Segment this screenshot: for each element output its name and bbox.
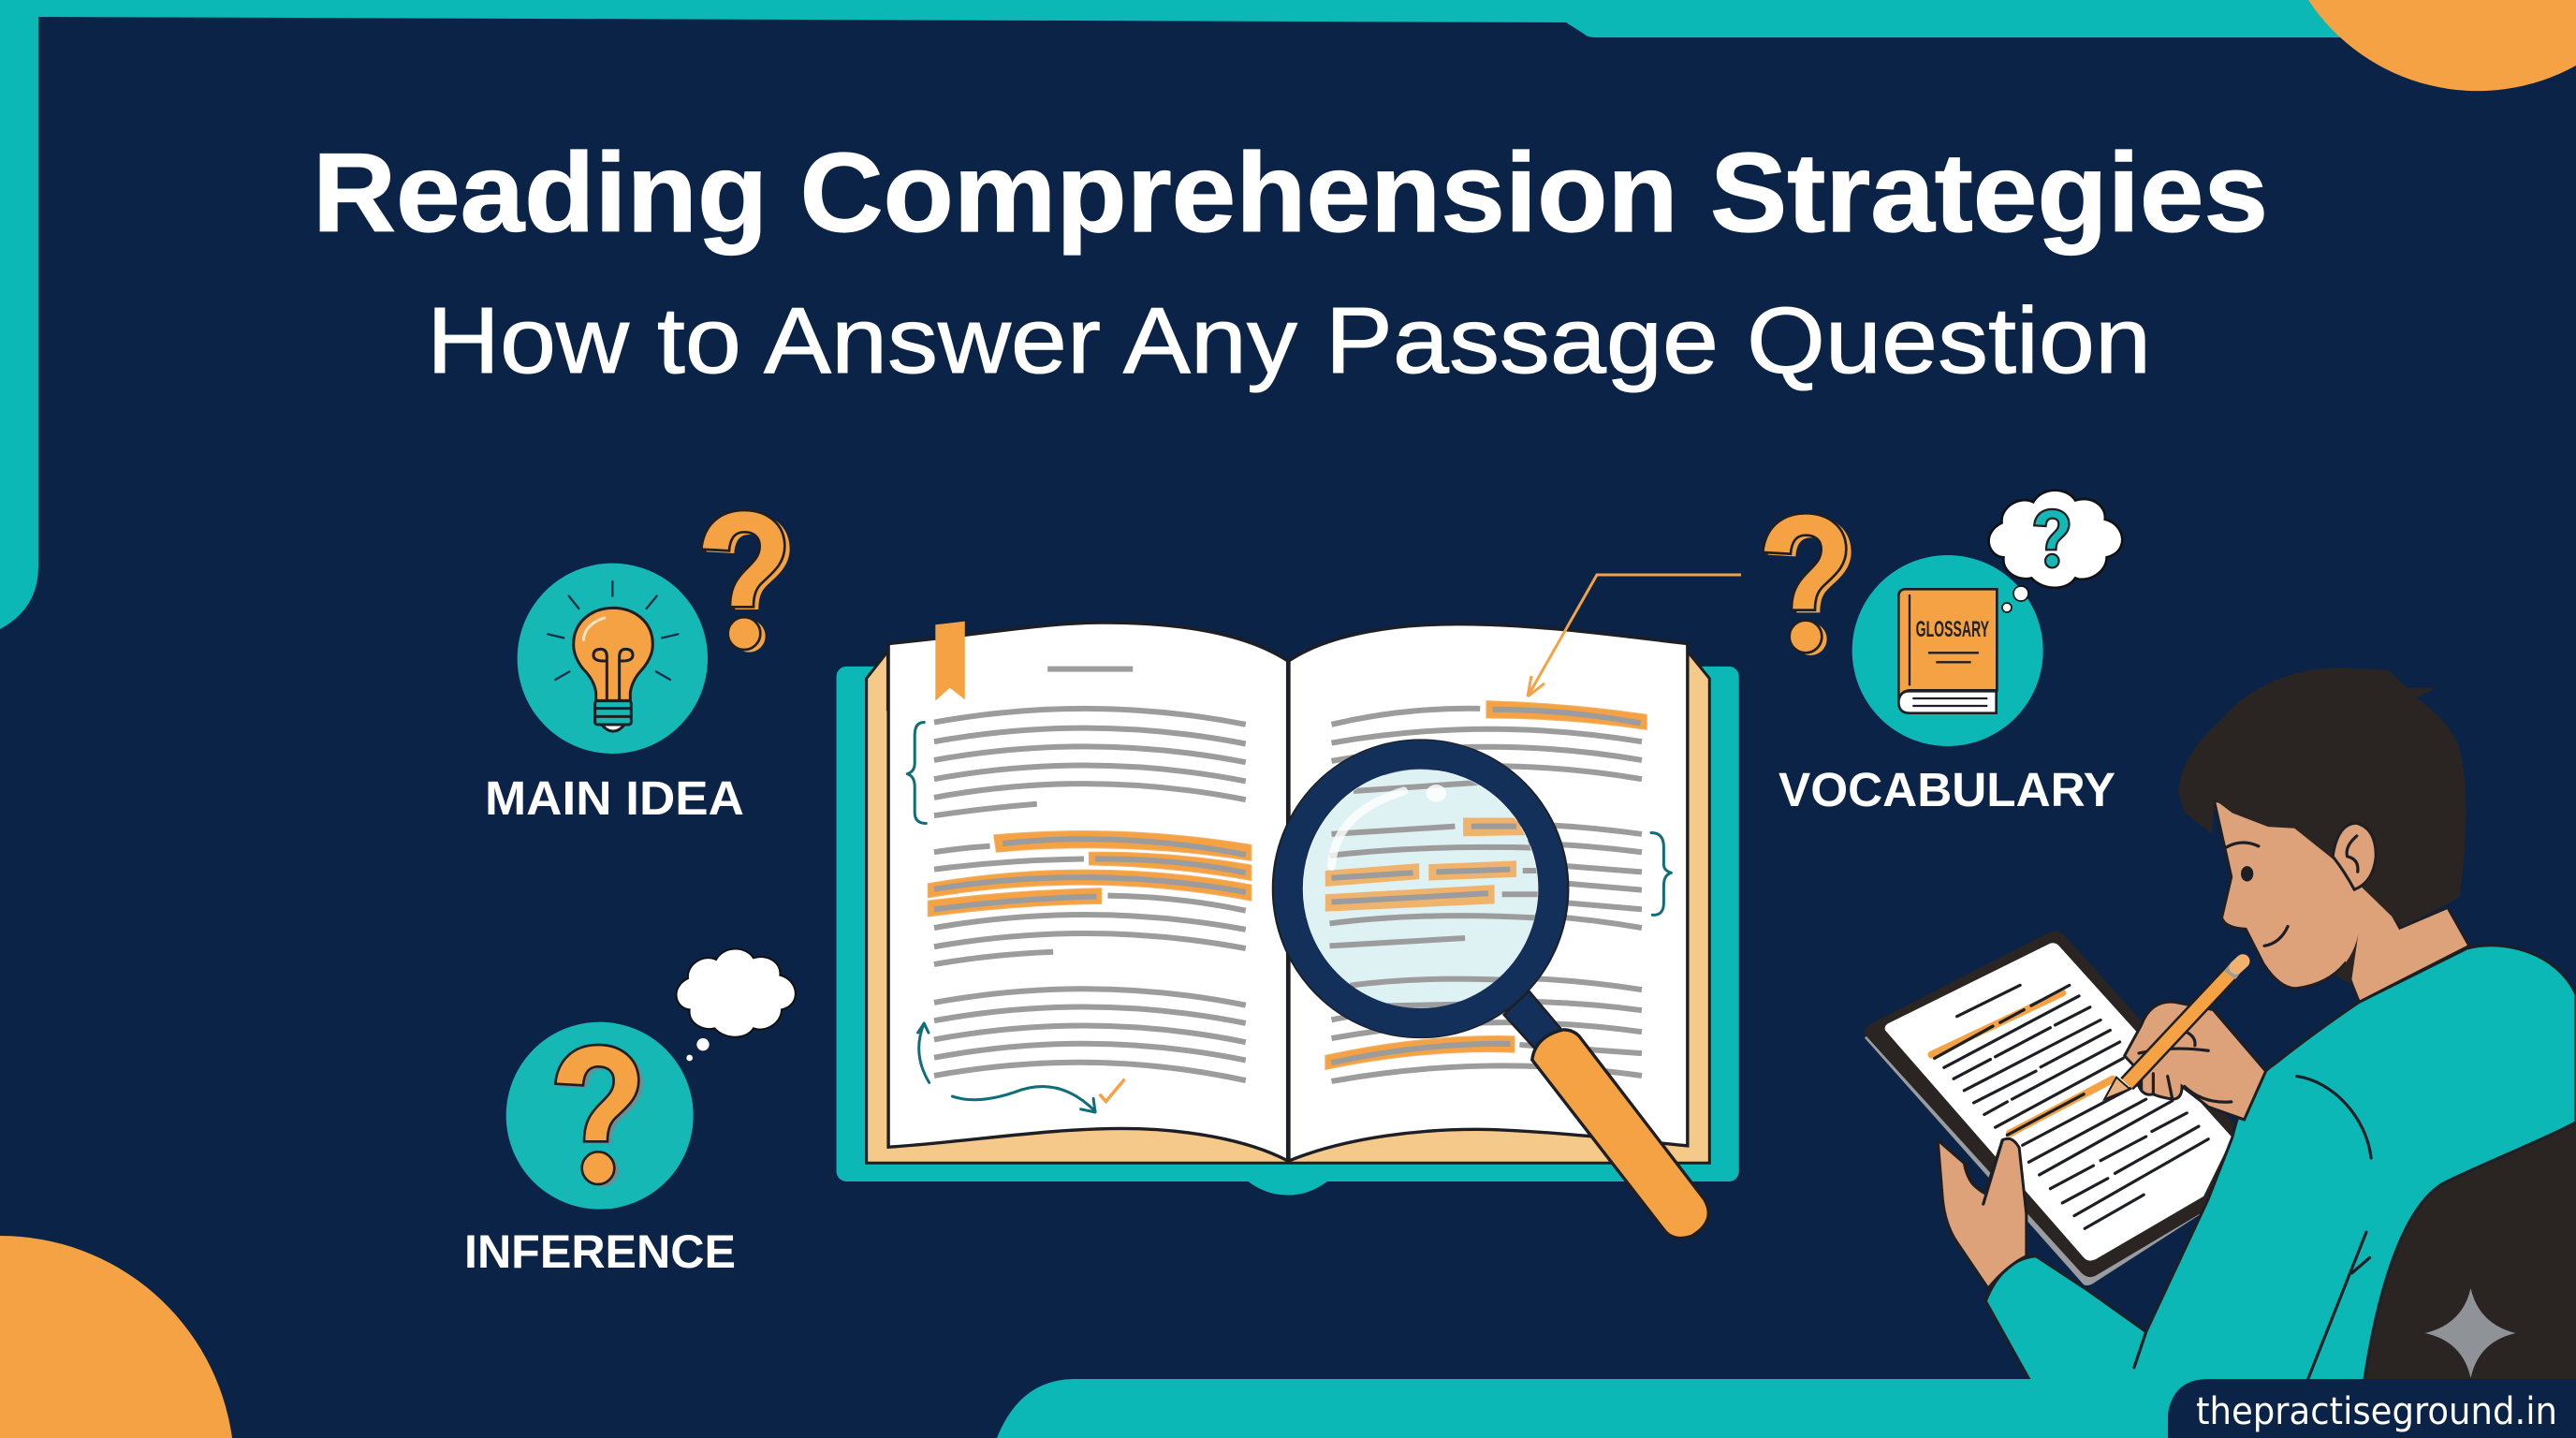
icon: light bulb [548, 581, 678, 731]
right page text lines [1325, 701, 1647, 1081]
student: chair [2364, 1123, 2576, 1383]
student: ear [2333, 823, 2376, 889]
student: sweater fold lines [2134, 1077, 2371, 1383]
student: collar shadow [2335, 928, 2359, 984]
icon: teal circle [1852, 555, 2043, 746]
student: left hand holding tablet [1938, 1138, 2027, 1288]
label: main idea: MAIN IDEA [485, 771, 744, 825]
annotation: squiggle arrow [952, 1087, 1095, 1112]
icon: thought cloud [677, 949, 796, 1061]
title: Reading Comprehension Strategies [313, 130, 2268, 256]
magnifier: rim outline [1273, 741, 1568, 1037]
annotation: up arrow [918, 1023, 929, 1082]
arrow: callout to highlighted word [1528, 575, 1741, 697]
student: right hand [2125, 1002, 2266, 1120]
icon: teal circle [506, 1022, 694, 1210]
student: eyebrow, eye and smile [2227, 843, 2288, 946]
magnifier: navy rim [1288, 755, 1553, 1023]
magnifier: glass [1303, 770, 1538, 1009]
icon: thought cloud with question [1989, 491, 2122, 612]
highlight top right [1486, 701, 1647, 729]
label: vocabulary: VOCABULARY [1778, 763, 2115, 816]
subtitle: How to Answer Any Passage Question [427, 288, 2151, 393]
icon group: inference [506, 949, 796, 1210]
student: teal sweater [1985, 946, 2576, 1383]
icon group: vocabulary [1763, 491, 2122, 746]
footer: website tab [2168, 1379, 2576, 1438]
book: right page [1289, 624, 1688, 1161]
corner: top-right orange circle [2308, 0, 2576, 91]
frame: top-left teal border [0, 0, 2576, 629]
footer: teal band [997, 1379, 2576, 1438]
icon: glossary book [1898, 589, 1997, 713]
left page text lines [928, 669, 1251, 1080]
open book illustration [837, 622, 1739, 1239]
icon: question mark [1763, 513, 1852, 655]
student reading on tablet [1865, 668, 2576, 1383]
tablet: text lines [1935, 985, 2208, 1228]
icon: glossary book: GLOSSARY [1916, 617, 1989, 642]
tablet [1865, 931, 2237, 1285]
icon group: main idea [518, 510, 790, 754]
footer: website text: thepractiseground.in [2196, 1390, 2557, 1433]
label: inference: INFERENCE [464, 1225, 736, 1278]
annotation: right brace [1651, 833, 1671, 915]
annotation: left brace [907, 723, 926, 823]
magnifier: magnified text [1325, 783, 1542, 1006]
book: left page [888, 623, 1288, 1161]
highlighted sentences [928, 830, 1251, 917]
magnifier: orange handle [1532, 1030, 1708, 1239]
tablet: highlights [1932, 993, 2113, 1134]
highlight bottom right [1325, 1036, 1515, 1070]
bookmark [935, 622, 965, 701]
book: teal cover [837, 667, 1739, 1196]
icon: question mark [701, 510, 790, 653]
icon: question mark [555, 1045, 643, 1187]
student: pencil [2104, 961, 2243, 1099]
annotation: check mark [1100, 1079, 1125, 1102]
student: neck and face [2214, 800, 2469, 1002]
icon: teal circle [518, 564, 708, 754]
icon: sparkle watermark [2425, 1288, 2516, 1378]
corner: bottom-left orange circle [0, 1236, 232, 1438]
magnifier: neck [1504, 991, 1563, 1049]
magnifying glass [1273, 741, 1708, 1239]
student: hair [2178, 668, 2466, 927]
book: peach page block [867, 652, 1709, 1163]
